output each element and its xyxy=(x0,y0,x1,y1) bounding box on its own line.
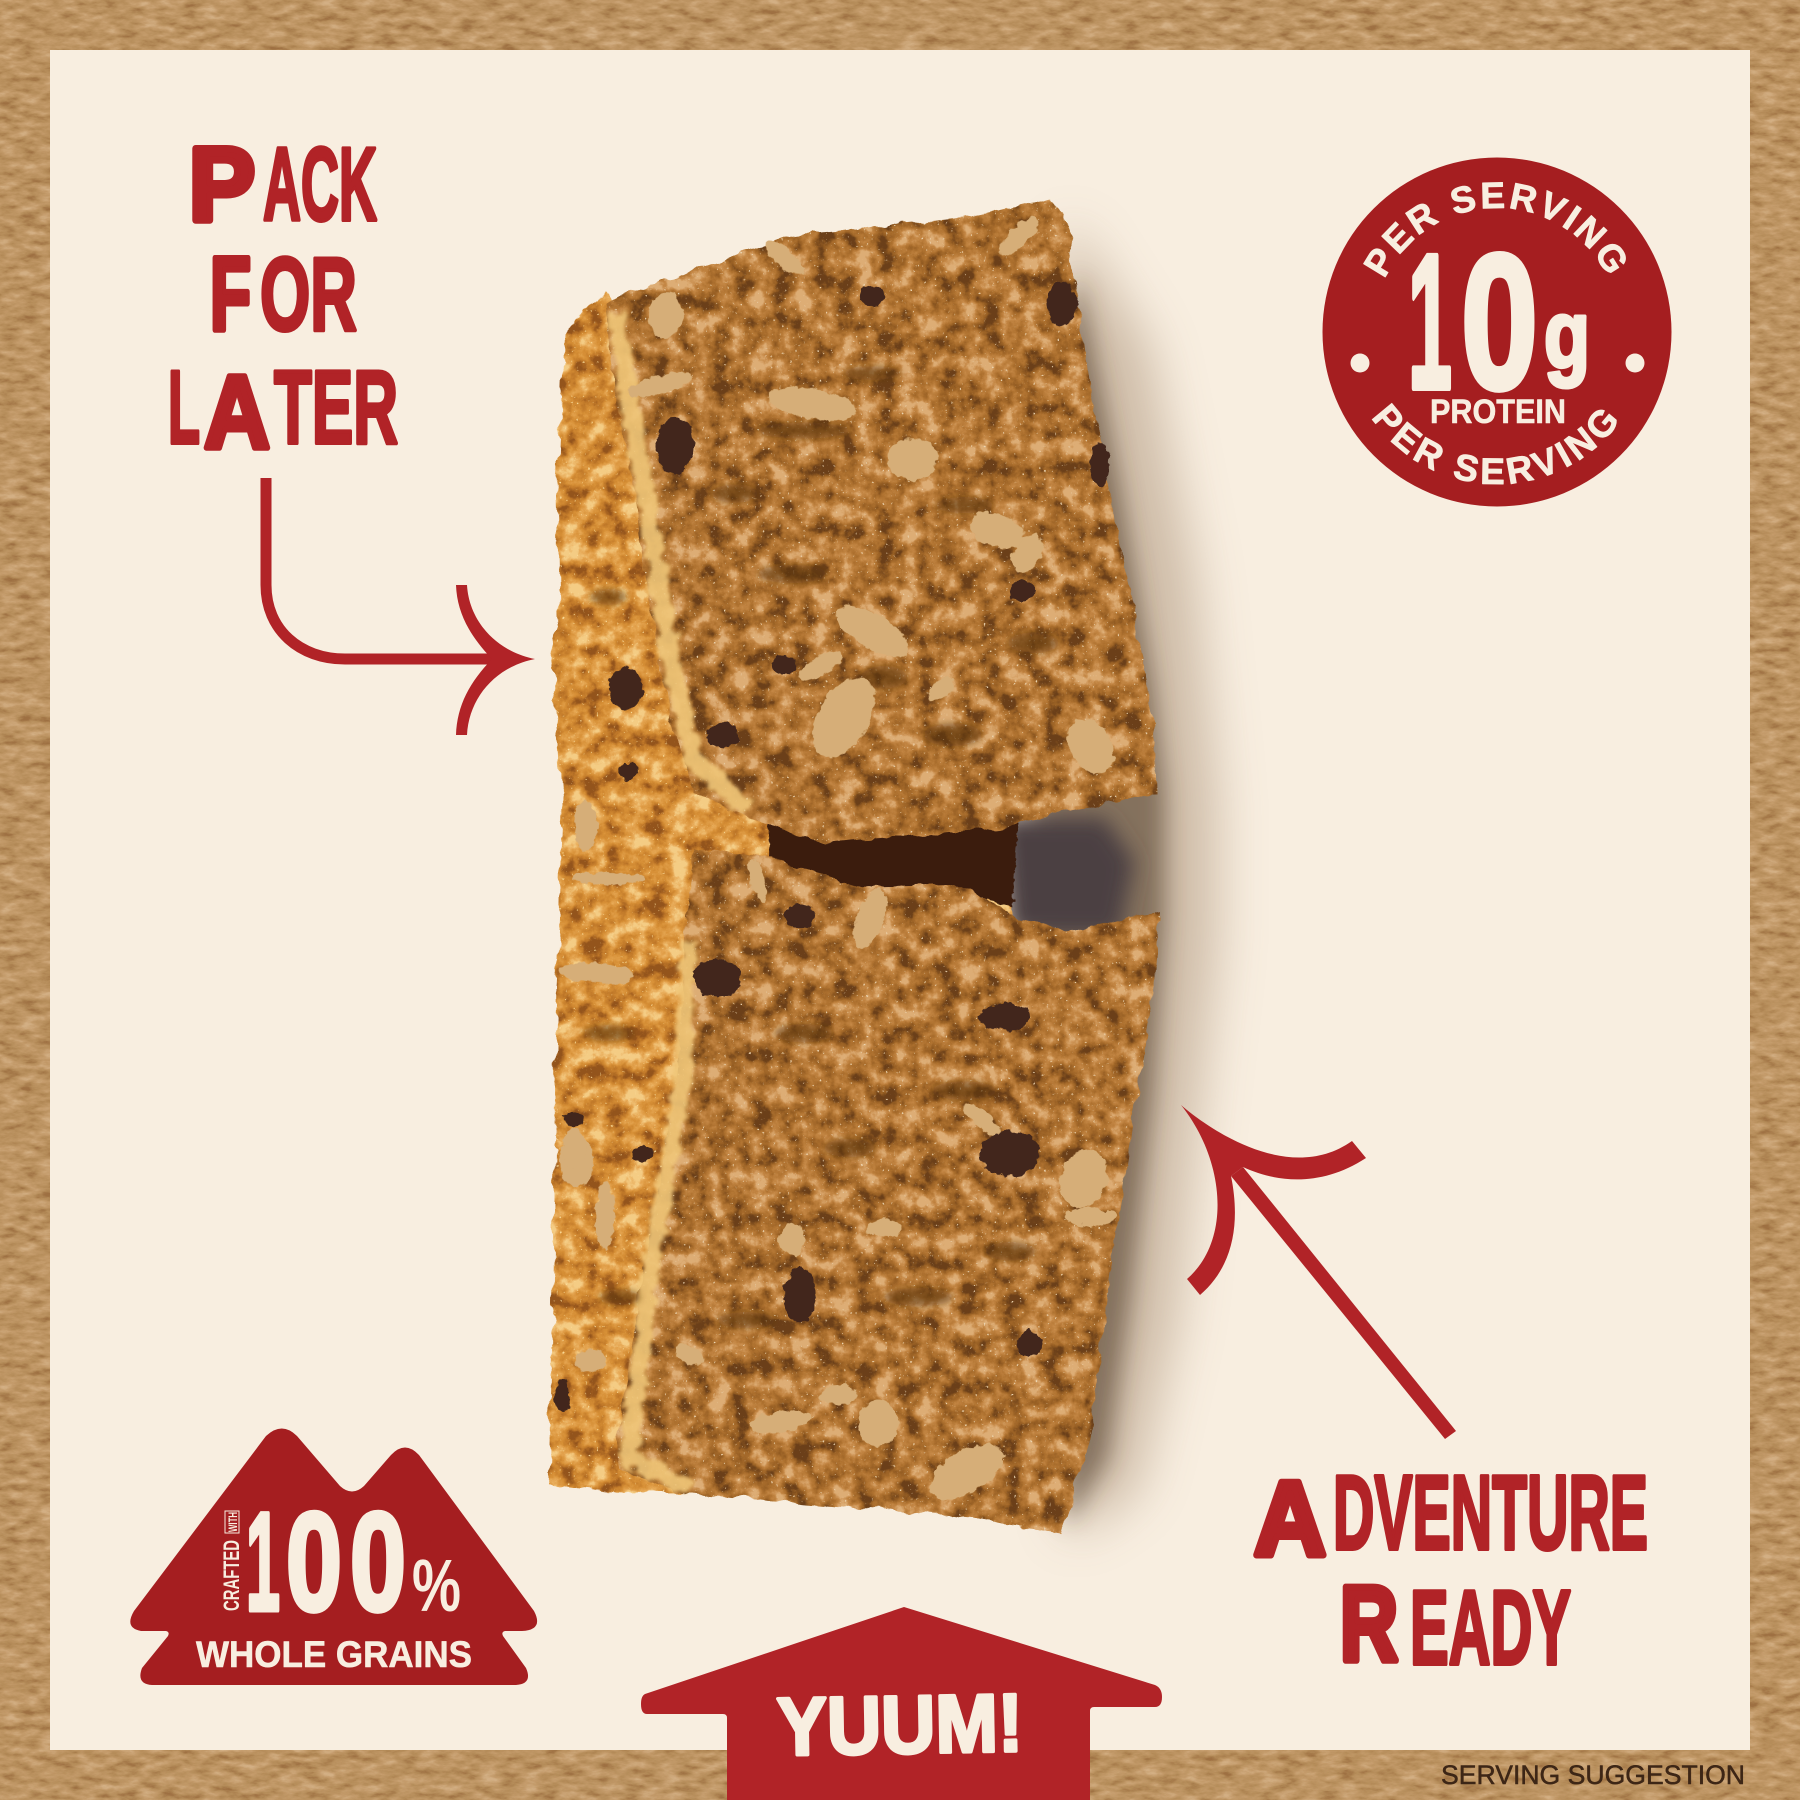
percent sign: % xyxy=(412,1544,461,1627)
left dot xyxy=(1350,354,1370,372)
crevices xyxy=(583,366,1058,1328)
wide soft bar shadow xyxy=(1033,218,1217,1538)
word: For: F xyxy=(210,237,251,353)
arrow tab: yuum xyxy=(641,1607,1162,1800)
big number 100: 0 xyxy=(286,1483,342,1640)
badge: 100% whole grains xyxy=(130,1428,537,1685)
big number 10: 0 xyxy=(1461,214,1538,429)
word: Later: L xyxy=(168,350,200,466)
badge: 10g protein per serving xyxy=(1322,158,1672,506)
word: Adventure: A xyxy=(1254,1460,1326,1578)
word: Later: TER xyxy=(274,350,398,466)
arrow: adventure ready pointing at bar xyxy=(1181,1105,1456,1439)
word: Ready: EADY xyxy=(1410,1569,1571,1687)
footnote: serving suggestion: SERVING SUGGESTION xyxy=(1441,1760,1745,1790)
lower bar pale left edge xyxy=(629,941,689,1488)
chocolate chips xyxy=(554,282,1109,1411)
label: whole grains: WHOLE GRAINS xyxy=(196,1634,472,1675)
upper bar pale left edge xyxy=(615,312,746,809)
curved text: per serving top: PER SERVING xyxy=(1363,182,1626,278)
word: Later: A xyxy=(204,355,270,471)
heading: Adventure ready xyxy=(1254,1454,1648,1687)
big number 100: 1 xyxy=(246,1483,280,1640)
word: Pack: ACK xyxy=(263,127,377,243)
arrow: pack for later pointing at bar xyxy=(266,478,535,735)
lower front bar xyxy=(616,850,1159,1533)
curved text: per serving bottom: PER SERVING xyxy=(1372,402,1617,484)
big number 100: 0 xyxy=(350,1483,406,1640)
heading: Pack for later xyxy=(168,127,398,471)
dark shadow in gap xyxy=(999,817,1134,936)
right dot xyxy=(1626,354,1644,372)
word: For: OR xyxy=(260,237,357,353)
rotated label: with xyxy=(225,1511,240,1533)
label: yuum: YUUM! xyxy=(776,1678,1024,1773)
rotated label: with: WITH xyxy=(226,1512,240,1532)
label: protein: PROTEIN xyxy=(1430,393,1566,431)
big number 10: 1 xyxy=(1408,214,1452,429)
back bar xyxy=(549,293,1016,1492)
word: Pack: P xyxy=(189,127,255,243)
photo: stacked oat bars xyxy=(549,199,1217,1538)
word: Ready: R xyxy=(1340,1565,1398,1683)
rotated label: crafted: CRAFTED xyxy=(219,1540,244,1611)
close bar shadow xyxy=(1033,276,1165,1527)
oat flakes xyxy=(559,211,1123,1510)
upper front bar xyxy=(605,199,1156,844)
dark gap between bars xyxy=(769,821,1018,907)
unit g: g xyxy=(1544,281,1590,388)
